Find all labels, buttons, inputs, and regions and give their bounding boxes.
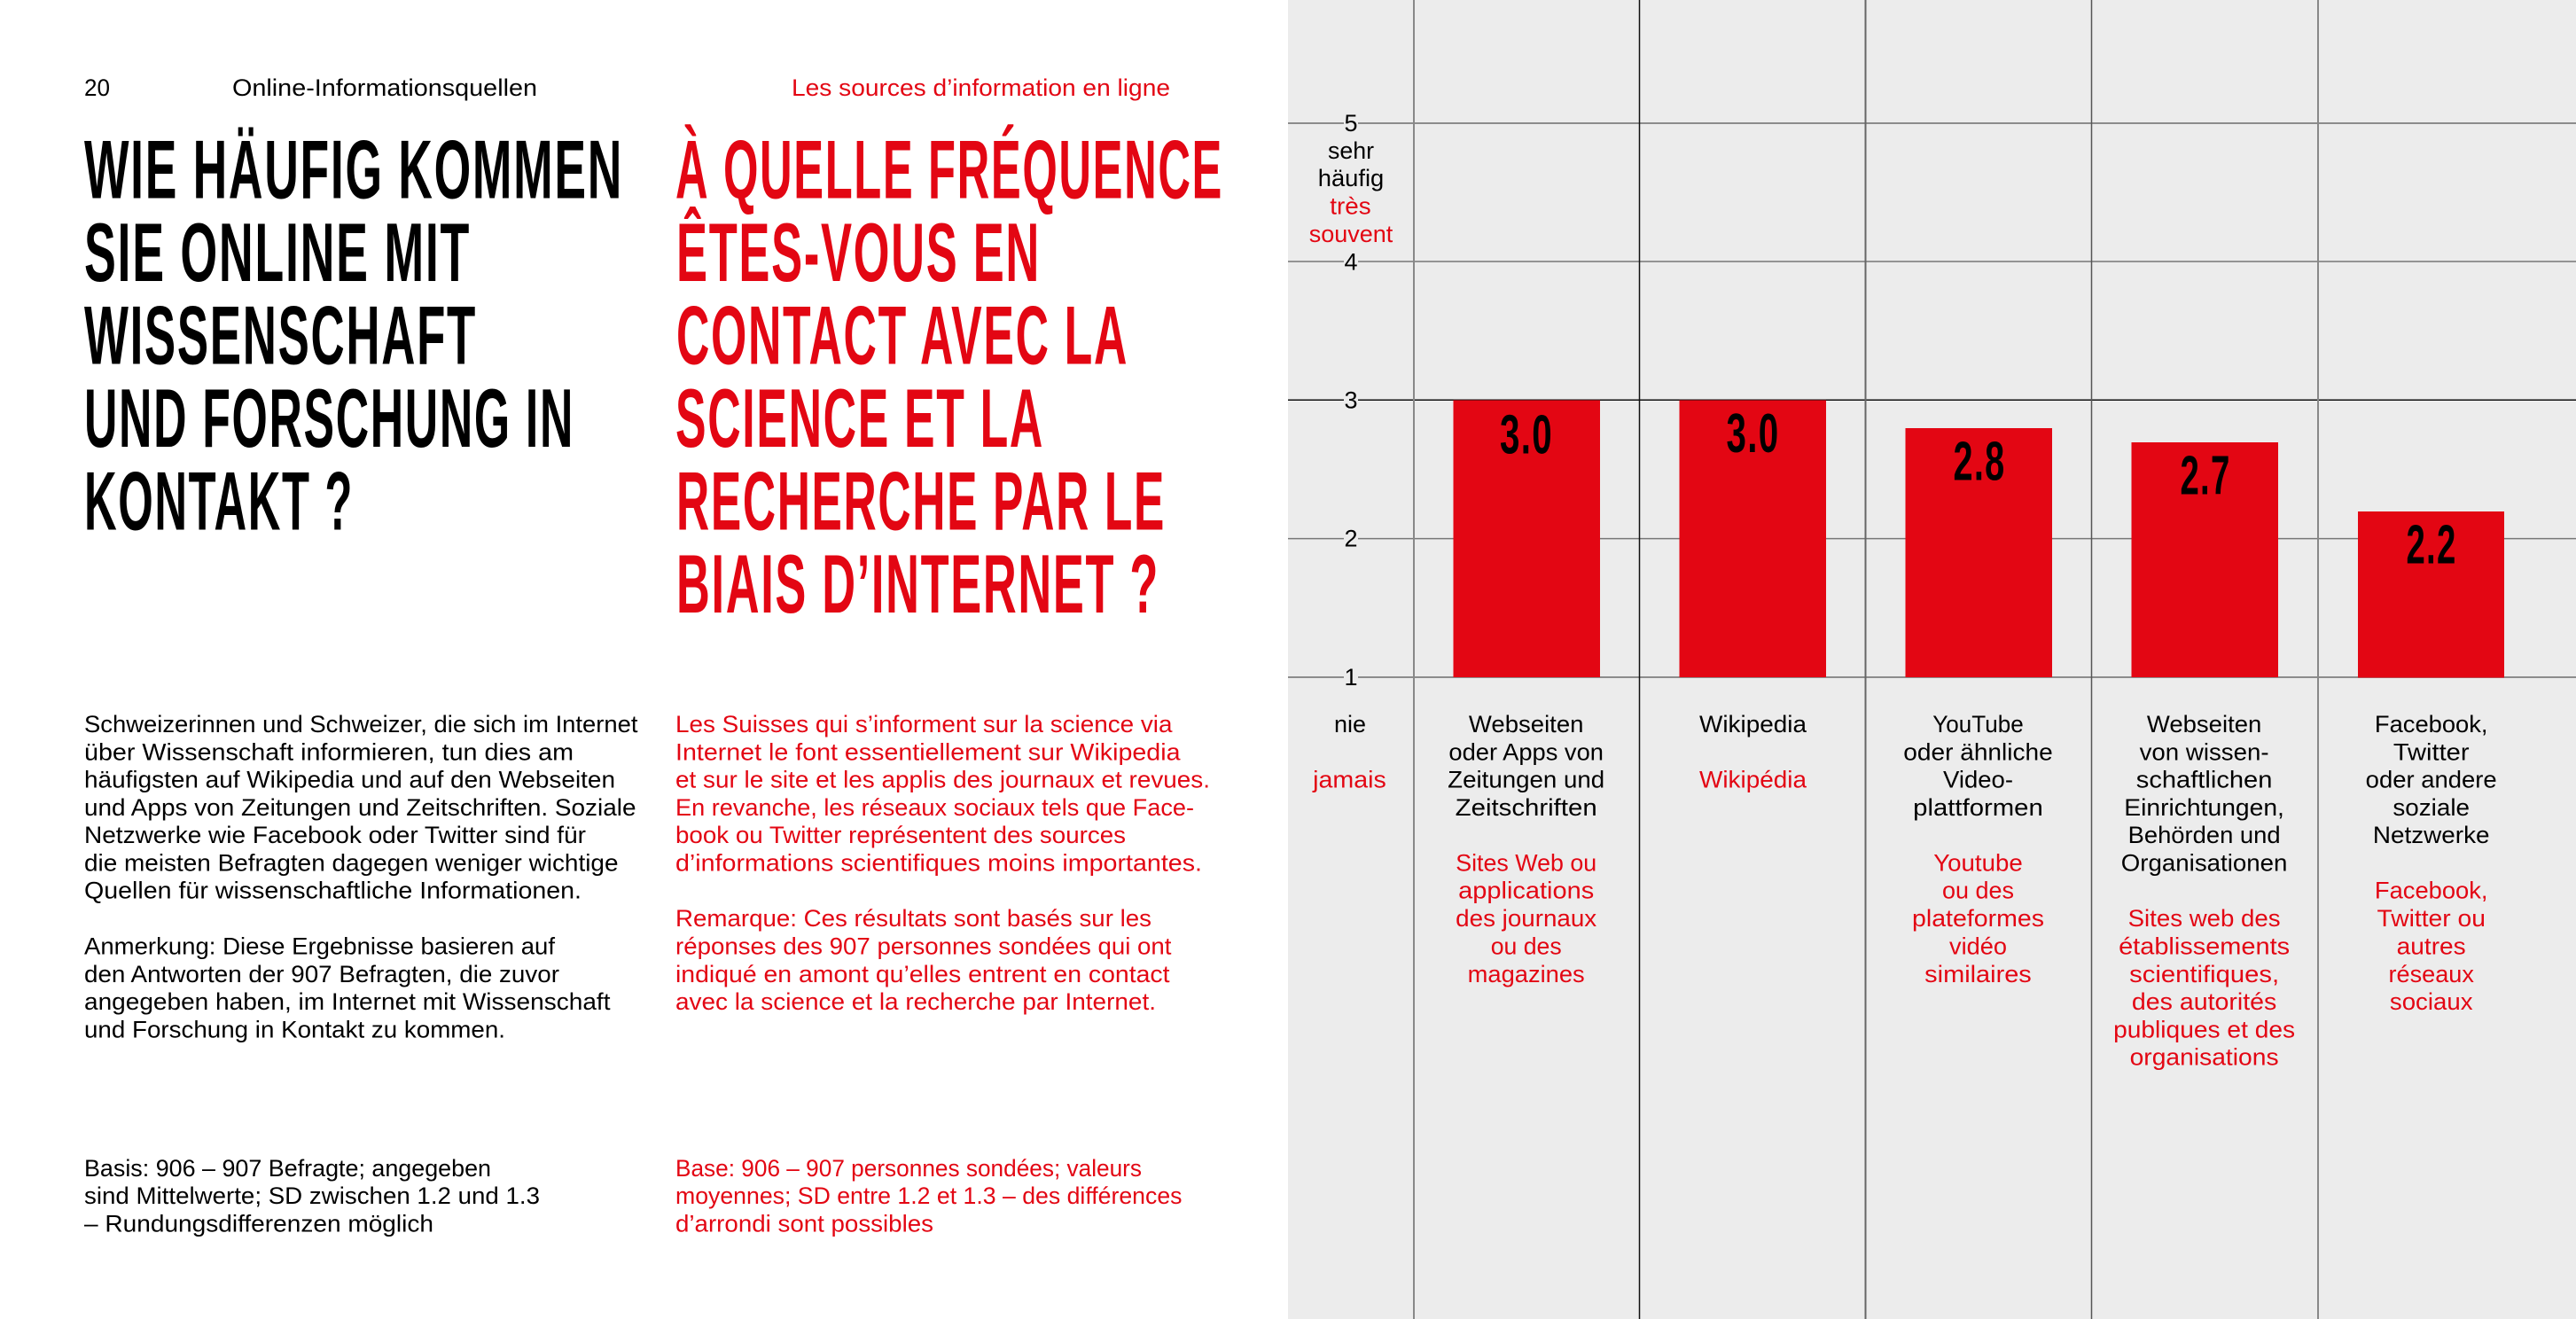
axis label: nie / jamais: jamais [1312,767,1386,793]
category label: newspapers and magazines: applications [1458,878,1594,904]
body text: German: Anmerkung: Diese Ergebnisse basieren auf [84,933,556,959]
category label: scientific institutions: schaftlichen [2136,767,2272,793]
category label: scientific institutions: publiques et des [2113,1016,2295,1042]
category label: YouTube: ou des [1942,878,2014,904]
category label: YouTube: Video- [1943,767,2013,793]
base note: French: d’arrondi sont possibles [675,1210,933,1237]
body text: German: Quellen für wissenschaftliche Informationen. [84,878,582,904]
bar: Einrichtungen 2.7: 2.7 [2181,446,2230,507]
category label: social networks: oder andere [2366,767,2497,793]
axis label: nie / jamais: nie [1334,711,1366,738]
category label: Wikipedia: Wikipedia [1699,711,1807,738]
base note: German: – Rundungsdifferenzen möglich [84,1210,433,1237]
base note: German: Basis: 906 – 907 Befragte; angegeben [84,1155,491,1182]
category label: scientific institutions: von wissen- [2140,738,2269,765]
base note: French: Base: 906 – 907 personnes sondées; valeurs [675,1155,1142,1182]
body text: German: und Apps von Zeitungen und Zeitschriften. Soziale [84,794,636,821]
heading: French: BIAIS D’INTERNET ? [676,537,1159,630]
category label: social networks: réseaux [2388,961,2474,987]
category label: social networks: soziale [2393,794,2470,821]
chart panel background [1288,0,2576,1319]
bar: Wikipedia 3.0 [1679,401,1826,677]
category label: newspapers and magazines: des journaux [1456,905,1597,932]
base note: German [84,1155,540,1237]
body text: French: book ou Twitter représentent des sources [675,822,1126,848]
grid lines [1288,0,2576,1319]
page number: 20 [84,74,110,101]
bar: Webseiten Zeitungen 3.0: 3.0 [1500,404,1553,466]
body text: French: Internet le font essentiellement sur Wikipedia [675,738,1182,765]
body text: French: avec la science et la recherche par Internet. [675,988,1156,1015]
category label: newspapers and magazines: Webseiten [1469,711,1583,738]
body text: French: Remarque: Ces résultats sont basés sur les [675,905,1151,932]
category label: YouTube: plateformes [1912,905,2044,932]
category label: YouTube [1903,711,2053,987]
category label: social networks: Twitter [2393,738,2470,765]
heading: German: UND FORSCHUNG IN [84,371,574,464]
bar: YouTube 2.8 [1906,428,2052,677]
body text: French: indiqué en amont qu’elles entrent en contact [675,961,1170,987]
category label: social networks: Facebook, [2375,711,2487,738]
body text: French: et sur le site et les applis des journaux et revues. [675,767,1210,793]
bar: Webseiten Zeitungen 3.0 [1454,401,1600,677]
body text: German: Netzwerke wie Facebook oder Twitter sind für [84,822,586,848]
heading: French: ÊTES-VOUS EN [676,206,1041,299]
y axis: top label [1309,137,1393,247]
y axis: scale numbers: 5 [1344,110,1358,137]
category label: YouTube: Youtube [1933,849,2023,876]
category label: social networks: autres [2397,933,2466,959]
y axis: top label: sehr [1328,137,1374,164]
category label: YouTube: similaires [1924,961,2032,987]
body text: German [84,711,638,1042]
body text: French: réponses des 907 personnes sondées qui ont [675,933,1172,959]
heading: French: CONTACT AVEC LA [676,289,1128,381]
bar: Einrichtungen 2.7 [2131,442,2278,677]
category label: scientific institutions: scientifiques, [2129,961,2279,987]
heading: German: SIE ONLINE MIT [84,206,471,299]
category label: YouTube: oder ähnliche [1903,738,2053,765]
body text: German: angegeben haben, im Internet mit Wissenschaft [84,988,611,1015]
heading: French: SCIENCE ET LA [675,371,1044,464]
y axis: scale numbers: 1 [1344,664,1358,691]
base note: German: sind Mittelwerte; SD zwischen 1.2 und 1.3 [84,1182,540,1209]
body text: French [675,711,1210,1015]
category label: YouTube: YouTube [1932,711,2024,738]
bar: Facebook 2.2 [2358,511,2504,677]
category label: social networks [2366,711,2497,1015]
category label: social networks: Netzwerke [2373,822,2490,848]
category label: scientific institutions: Einrichtungen, [2124,794,2284,821]
bar: Wikipedia 3.0: 3.0 [1727,403,1780,464]
category label: scientific institutions: organisations [2130,1044,2279,1071]
category label: newspapers and magazines: Zeitungen und [1448,767,1604,793]
heading: French: À QUELLE FRÉQUENCE [675,122,1223,216]
category label: social networks: Twitter ou [2377,905,2486,932]
running head: German: Online-Informationsquellen [232,74,537,101]
category label: Wikipedia [1699,711,1807,793]
body text: German: über Wissenschaft informieren, tun dies am [84,738,574,765]
category label: YouTube: vidéo [1949,933,2007,959]
bar: YouTube 2.8: 2.8 [1954,432,2005,493]
category label: scientific institutions [2113,711,2295,1071]
body text: German: und Forschung in Kontakt zu kommen. [84,1016,505,1042]
category label: newspapers and magazines: Sites Web ou [1456,849,1596,876]
category label: scientific institutions: Organisationen [2121,849,2287,876]
y axis: scale numbers: 2 [1344,525,1358,551]
category label: scientific institutions: Behörden und [2128,822,2281,848]
body text: French: En revanche, les réseaux sociaux tels que Face- [675,794,1194,821]
category label: newspapers and magazines: ou des [1491,933,1562,959]
base note: French [675,1155,1183,1237]
category label: social networks: Facebook, [2375,878,2487,904]
heading: German: KONTAKT ? [84,454,354,548]
body text: German: die meisten Befragten dagegen weniger wichtige [84,849,619,876]
heading: German: WISSENSCHAFT [84,289,477,381]
body text: French: d’informations scientifiques moins importantes. [675,849,1202,876]
heading: French: RECHERCHE PAR LE [676,454,1166,548]
category label: scientific institutions: Sites web des [2128,905,2281,932]
y axis: scale numbers: 3 [1344,386,1358,413]
category label: scientific institutions: Webseiten [2147,711,2261,738]
body text: German: häufigsten auf Wikipedia und auf den Webseiten [84,767,615,793]
category label: newspapers and magazines [1448,711,1604,987]
heading: German [84,122,623,548]
heading: German: WIE HÄUFIG KOMMEN [84,122,623,216]
category label: newspapers and magazines: Zeitschriften [1456,794,1597,821]
category label: social networks: sociaux [2390,988,2473,1015]
body text: German: Schweizerinnen und Schweizer, die sich im Internet [84,711,638,738]
category label: scientific institutions: établissements [2119,933,2290,959]
body text: French: Les Suisses qui s’informent sur la science via [675,711,1174,738]
y axis: top label: très [1330,193,1371,220]
bar: Facebook 2.2: 2.2 [2406,515,2457,576]
base note: French: moyennes; SD entre 1.2 et 1.3 – des différences [675,1182,1183,1209]
heading: French [675,122,1223,630]
category label: YouTube: plattformen [1913,794,2043,821]
y axis: top label: souvent [1309,221,1393,247]
category label: Wikipedia: Wikipédia [1699,767,1807,793]
category label: newspapers and magazines: oder Apps von [1448,738,1604,765]
body text: German: den Antworten der 907 Befragten, die zuvor [84,961,559,987]
y axis: scale numbers: 4 [1344,248,1358,275]
bar chart [1454,401,2504,677]
axis label: nie / jamais [1312,711,1386,793]
y axis: top label: häufig [1318,165,1384,191]
running head: French: Les sources d’information en ligne [792,74,1170,101]
category label: scientific institutions: des autorités [2132,988,2276,1015]
category label: newspapers and magazines: magazines [1468,961,1585,987]
y axis: scale numbers [1344,110,1358,691]
